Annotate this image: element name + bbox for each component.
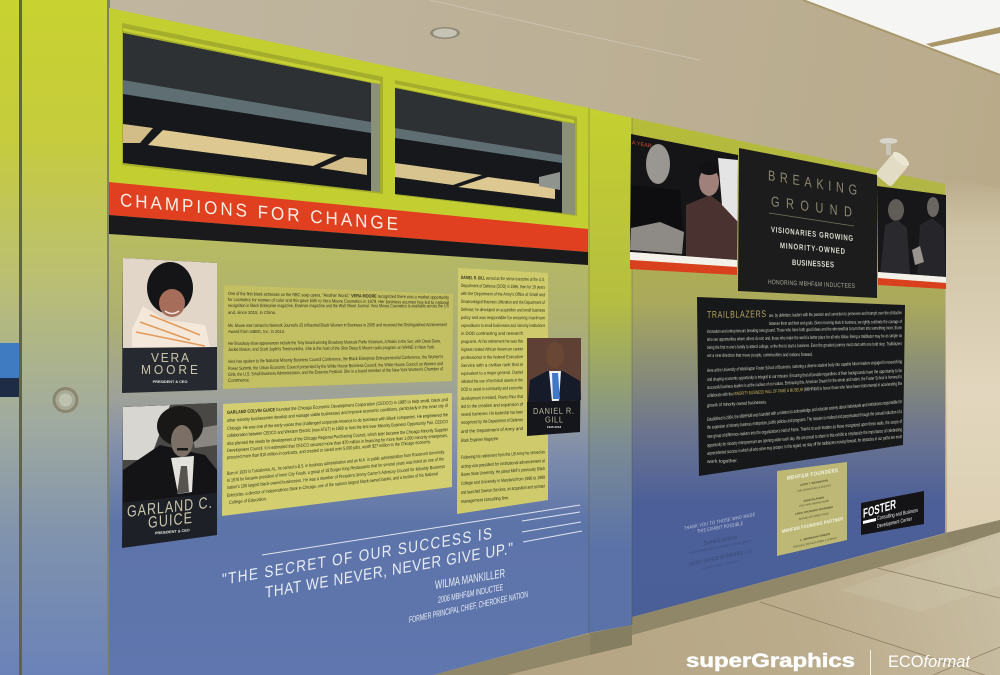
text block: Vera Moore biography: Ms. Moore was named to Network Journal's 25 Influential Black Women in Business in 2005 and received the Distinguished Achievement	[228, 322, 448, 328]
text block: Daniel Gill biography	[457, 268, 548, 514]
panel: thank you credits	[684, 511, 755, 571]
text block: Daniel Gill biography: recognized by the Department of Defense	[461, 417, 523, 425]
panel: MBHF&M founders: CHAIR, MBHF&M BOARD OF DIRECTORS	[797, 483, 831, 493]
text block: Daniel Gill biography: Defense; he developed an acquisition and small business	[461, 307, 545, 313]
text block: Garland Guice biography: other minority businessmen develop and manage viable businesses and improve economic conditions, particularly in the inner city of	[227, 403, 449, 423]
card: Vera Moore: MOORE	[141, 362, 198, 377]
text block: Daniel Gill biography: and launched Dawson Services, an acquisition and contract	[461, 483, 545, 495]
text block: Daniel Gill biography: Following his retirement from the US Army he served as	[461, 449, 545, 460]
text block: Daniel Gill biography: development in Ireland, Puerto Rico that	[461, 394, 524, 401]
photo strip: right inductees	[877, 186, 946, 289]
panel: trailblazers: between them and their end goals. Given recurring trials in business, we rightly celebrate the courage of	[769, 319, 902, 327]
text block: Daniel Gill biography: Service with a civilian rank that is	[461, 362, 524, 368]
panel: thank you credits: THANK YOU TO THOSE WHO MADE	[684, 511, 755, 531]
text block: Vera Moore biography: One of the first black actresses on the NBC soap opera, "Another World," VERA MOORE recognized there was a market opportunity	[228, 291, 450, 300]
text block: Daniel Gill biography: led to the creation and expansion of	[461, 402, 524, 409]
right wall panel	[632, 118, 945, 617]
panel: trailblazers: work together.	[707, 458, 738, 465]
windows	[122, 23, 577, 216]
panel: trailblazers: TRAILBLAZERS	[707, 308, 766, 320]
panel: MBHF&M founders: CAROL BROADWAY SCHREIBER	[795, 505, 833, 516]
text block: Vera Moore biography: for cosmetics for women of color and this gave birth to Vera Moore Cosmetics in 1979. Her business acumen has led to national	[228, 297, 449, 305]
floor	[433, 520, 1000, 675]
text block: Daniel Gill biography: Disadvantaged Business Utilization and the Department of	[461, 299, 545, 305]
card: Garland C. Guice: GARLAND C.	[127, 494, 212, 521]
text block: Vera Moore biography: Commerce.	[228, 377, 250, 383]
text block: Garland Guice biography: Development Council. It is estimated that CEDCO secured more than $70 million in financing for more than 1,000 minority enterprises,	[227, 433, 448, 453]
text block: Vera Moore biography	[223, 285, 453, 389]
text block: Daniel Gill biography: initiated the use of technical assets in the	[461, 377, 523, 384]
panel: breaking ground sign: BREAKING	[768, 167, 857, 198]
text block: Vera Moore biography: Her Broadway show appearances include the Tony Award-winning Broadway Musicals Purlie Victorious, A Raisin in the Sun, with Ossie Davis,	[228, 338, 441, 346]
card: Daniel R. Gill: GILL	[545, 415, 563, 425]
panel: MBHF&M founders: MBHF&M FOUNDING PARTNER	[782, 516, 844, 534]
text block: Garland Guice biography: procured more than $10 million in contracts, and created or saved over 5,000 jobs, worth $27 million to the Chicago economy.	[227, 439, 431, 460]
text block: Daniel Gill biography: programs. At his retirement he was the	[461, 339, 523, 344]
logo: superGraphics: superGraphics	[686, 651, 855, 672]
ceiling	[100, 0, 1000, 200]
text block: Daniel Gill biography: Department of Defense (DOD) in 1986, then for 19 years	[461, 283, 545, 290]
text block: Garland Guice biography: GARLAND COLVIN GUICE founded the Chicago Economic Development Corporation (CEDCO) in 1985 to help small, black and	[227, 397, 448, 415]
text block: Daniel Gill biography: in DOD contracting and research	[461, 331, 523, 336]
text block: Daniel Gill biography: policy and was responsible for ensuring maximum	[461, 315, 545, 320]
text block: Daniel Gill biography: management consulting firm.	[461, 495, 509, 504]
text block: Daniel Gill biography: equivalent to a major general. Daniel	[461, 370, 523, 376]
photo strip: left inductees: A YEAR	[632, 140, 652, 150]
quote: "THE SECRET OF OUR SUCCESS IS	[222, 525, 492, 589]
panel: MBHF&M founders: L. BRONSON GREEN	[800, 532, 830, 542]
text block: Vera Moore biography: Jackie Mason, and Scott Joplin's Treemonisha. She is the host of the Skin Deep & Moore radio program on WHNE in New York.	[228, 345, 435, 352]
icon: track light	[875, 138, 911, 187]
quote: FORMER PRINCIPAL CHIEF, CHEROKEE NATION	[409, 589, 528, 625]
panel: breaking ground sign	[738, 148, 877, 298]
panel: trailblazers: growth of minority-owned businesses.	[707, 399, 767, 409]
main wall	[109, 182, 588, 675]
panel: MBHF&M founders: LEROY T. WASHINGTON	[800, 478, 828, 487]
left door panels	[0, 0, 110, 675]
text block: Garland Guice biography: collaboration between CEDCO and Western Electric (now AT&T) in 1968 to host the first ever Minority Business Opportunity Fair. CEDCO	[227, 419, 448, 438]
text block: Garland Guice biography: College of Education.	[229, 496, 267, 505]
panel: breaking ground sign: MINORITY-OWNED	[780, 241, 845, 256]
text block: Daniel Gill biography: Black Engineer Magazine.	[461, 436, 499, 443]
card: Daniel R. Gill: DANIEL R.	[533, 406, 574, 416]
quote: THAT WE NEVER, NEVER GIVE UP."	[265, 539, 513, 602]
text block: Daniel Gill biography: College and University in Maryland from 1996 to 1999	[461, 475, 545, 486]
text block: Garland Guice biography: nation's 100 largest black-owned businesses. He was a member of President Jimmy Carter's Advisory Council for Minority Business	[227, 464, 446, 490]
text block: Garland Guice biography: also planned the needs for development of the Chicago Regional Purchasing Council, which later became the Chicago Minority Supplier	[227, 427, 448, 446]
text block: Daniel Gill biography: Bowie State University. He joined MBF's previously Black	[461, 466, 545, 477]
text block: Daniel Gill biography: expenditures to small businesses and minority institutions	[461, 323, 545, 328]
column	[588, 108, 632, 633]
card: Vera Moore: PRESIDENT & CEO	[153, 380, 187, 384]
text block: Vera Moore biography: recognition in Black Enterprise magazine, Essence magazine and the Wall Street Journal. Vera Moore Cosmetics is available across the US	[228, 303, 449, 308]
card: Vera Moore	[120, 255, 220, 393]
text block: Daniel Gill biography: several businesses. His leadership has been	[461, 409, 523, 417]
text block: Garland Guice biography	[222, 393, 452, 516]
panel: breaking ground sign: HONORING MBHF&M INDUCTEES	[768, 280, 855, 290]
panel: trailblazers	[697, 297, 905, 476]
panel: thank you credits: EXHIBIT FABRICATION, DESIGN & INSTALLATION	[689, 538, 751, 555]
panel: MBHF&M founders: PRESIDENT, BRONSON GREEN & COMPANY	[793, 536, 837, 549]
text block: Daniel Gill biography: highest ranked African American career	[461, 346, 523, 352]
baseboards	[433, 520, 1000, 675]
quote	[222, 525, 528, 625]
quote rules	[262, 505, 582, 555]
logo: Foster: FOSTER	[863, 496, 896, 521]
panel: trailblazers: collaborate with the MINORITY BUSINESS HALL OF FAME & MUSEUM (MBHF&M) to honor those who have been instrumental in accelerating the	[707, 381, 902, 399]
panel: trailblazers: are, by definition, leaders with the passion and conviction to persevere and triumph over the obstacles	[769, 310, 902, 319]
photo strip: left inductees	[630, 134, 738, 275]
card: Daniel R. Gill	[525, 336, 583, 436]
logo: Foster: Consulting and Business	[877, 508, 918, 522]
logo: Foster: Development Center	[877, 516, 912, 530]
panel: MBHF&M founders: JOSE BLANDO	[803, 495, 824, 503]
panel: thank you credits: FRONT OFFICE INTERIORS, LLC	[689, 547, 752, 567]
panel: breaking ground sign: GROUND	[771, 193, 852, 220]
text block: Daniel Gill biography: DANIEL R. GILL served as the senior executive at the U.S.	[461, 275, 545, 282]
text block: Vera Moore biography: Vera has spoken to the National Minority Business Council Conference, the Black Enterprise Entrepreneurial Conference, the Women's	[228, 354, 444, 364]
text block: Vera Moore biography: and, since 2015, in China.	[228, 310, 276, 315]
panel: breaking ground sign: VISIONARIES GROWING	[771, 225, 853, 243]
panel: trailblazers: set a new direction that move people, communities and nations forward.	[707, 352, 813, 359]
text block: Daniel Gill biography: professional in the federal Executive	[461, 354, 523, 360]
panel: breaking ground sign: BUSINESSES	[792, 258, 834, 270]
logo: Foster	[861, 491, 924, 535]
panel: champions for change banner	[109, 182, 588, 265]
panel: thank you credits: THIS EXHIBIT POSSIBLE	[697, 520, 743, 534]
text block: Daniel Gill biography: acting vice president for institutional advancement at	[461, 458, 546, 469]
card: Garland C. Guice: PRESIDENT & CEO	[155, 528, 190, 535]
text block: Garland Guice biography: Born in 1933 in Tuscaloosa, AL, he earned a B.S. in business administration and an M.A. in public administration from Roosevelt University.	[227, 449, 445, 476]
text block: Vera Moore biography: Power Summit, the Urban Economic Council presented by the White House Business Council, the White House Council on Women and	[228, 361, 443, 371]
quote: 2006 MBHF&M INDUCTEE	[438, 582, 503, 605]
text block: Vera Moore biography: Girls, the U.S. Small Business Administration, and the Essence Festival. She is a board member of the New York Women's Chamber of	[228, 366, 444, 377]
card: Garland C. Guice	[120, 400, 220, 548]
card: Vera Moore: VERA	[151, 350, 190, 365]
text block: Garland Guice biography: Enterprise, a director of Independence Bank in Chicago, one of the nation's largest black-owned banks, and a trustee of his National	[227, 471, 438, 498]
text block: Daniel Gill biography: DOD to assist in community and economic	[461, 385, 523, 392]
quote: WILMA MANKILLER	[435, 566, 505, 592]
text block: Garland Guice biography: Chicago. He was one of the early voices that challenged corporate America to do business with Black companies. He engineered the	[227, 412, 448, 431]
text block: Garland Guice biography: In 1976 he became president of Inner City Foods, a group of 18 Burger King Restaurants that for several years was listed as one of the	[227, 456, 444, 483]
heading: champions for change: CHAMPIONS FOR CHANGE	[120, 189, 398, 234]
divider: logos	[870, 650, 871, 675]
column edges	[589, 108, 632, 633]
logo: ecoformat: ECOformat	[888, 652, 971, 671]
text block: Daniel Gill biography: and the Department of Army and	[461, 426, 523, 434]
panel: MBHF&M founders: MBHF&M FOUNDERS	[787, 467, 838, 482]
panel: thank you credits: SuperGraphics	[704, 534, 737, 547]
panel: MBHF&M founders: VICE CHAIR, MBHF&M BOARD	[799, 499, 829, 508]
panel: MBHF&M founders	[777, 462, 847, 556]
text block: Vera Moore biography: Award from UBBG, Inc. in 2013.	[228, 329, 285, 334]
right side wall	[945, 178, 1000, 533]
panel: thank you credits: EXHIBIT WALL CONCEPT	[702, 558, 740, 571]
card: Garland C. Guice: GUICE	[148, 509, 192, 532]
soffit above banner	[109, 8, 589, 232]
card: Daniel R. Gill: 1935-2018	[547, 425, 561, 429]
text block: Daniel Gill biography: with the Department of the Army's Office of Small and	[461, 291, 545, 297]
panel: MBHF&M founders: BOARD OF DIRECTORS	[799, 511, 829, 521]
